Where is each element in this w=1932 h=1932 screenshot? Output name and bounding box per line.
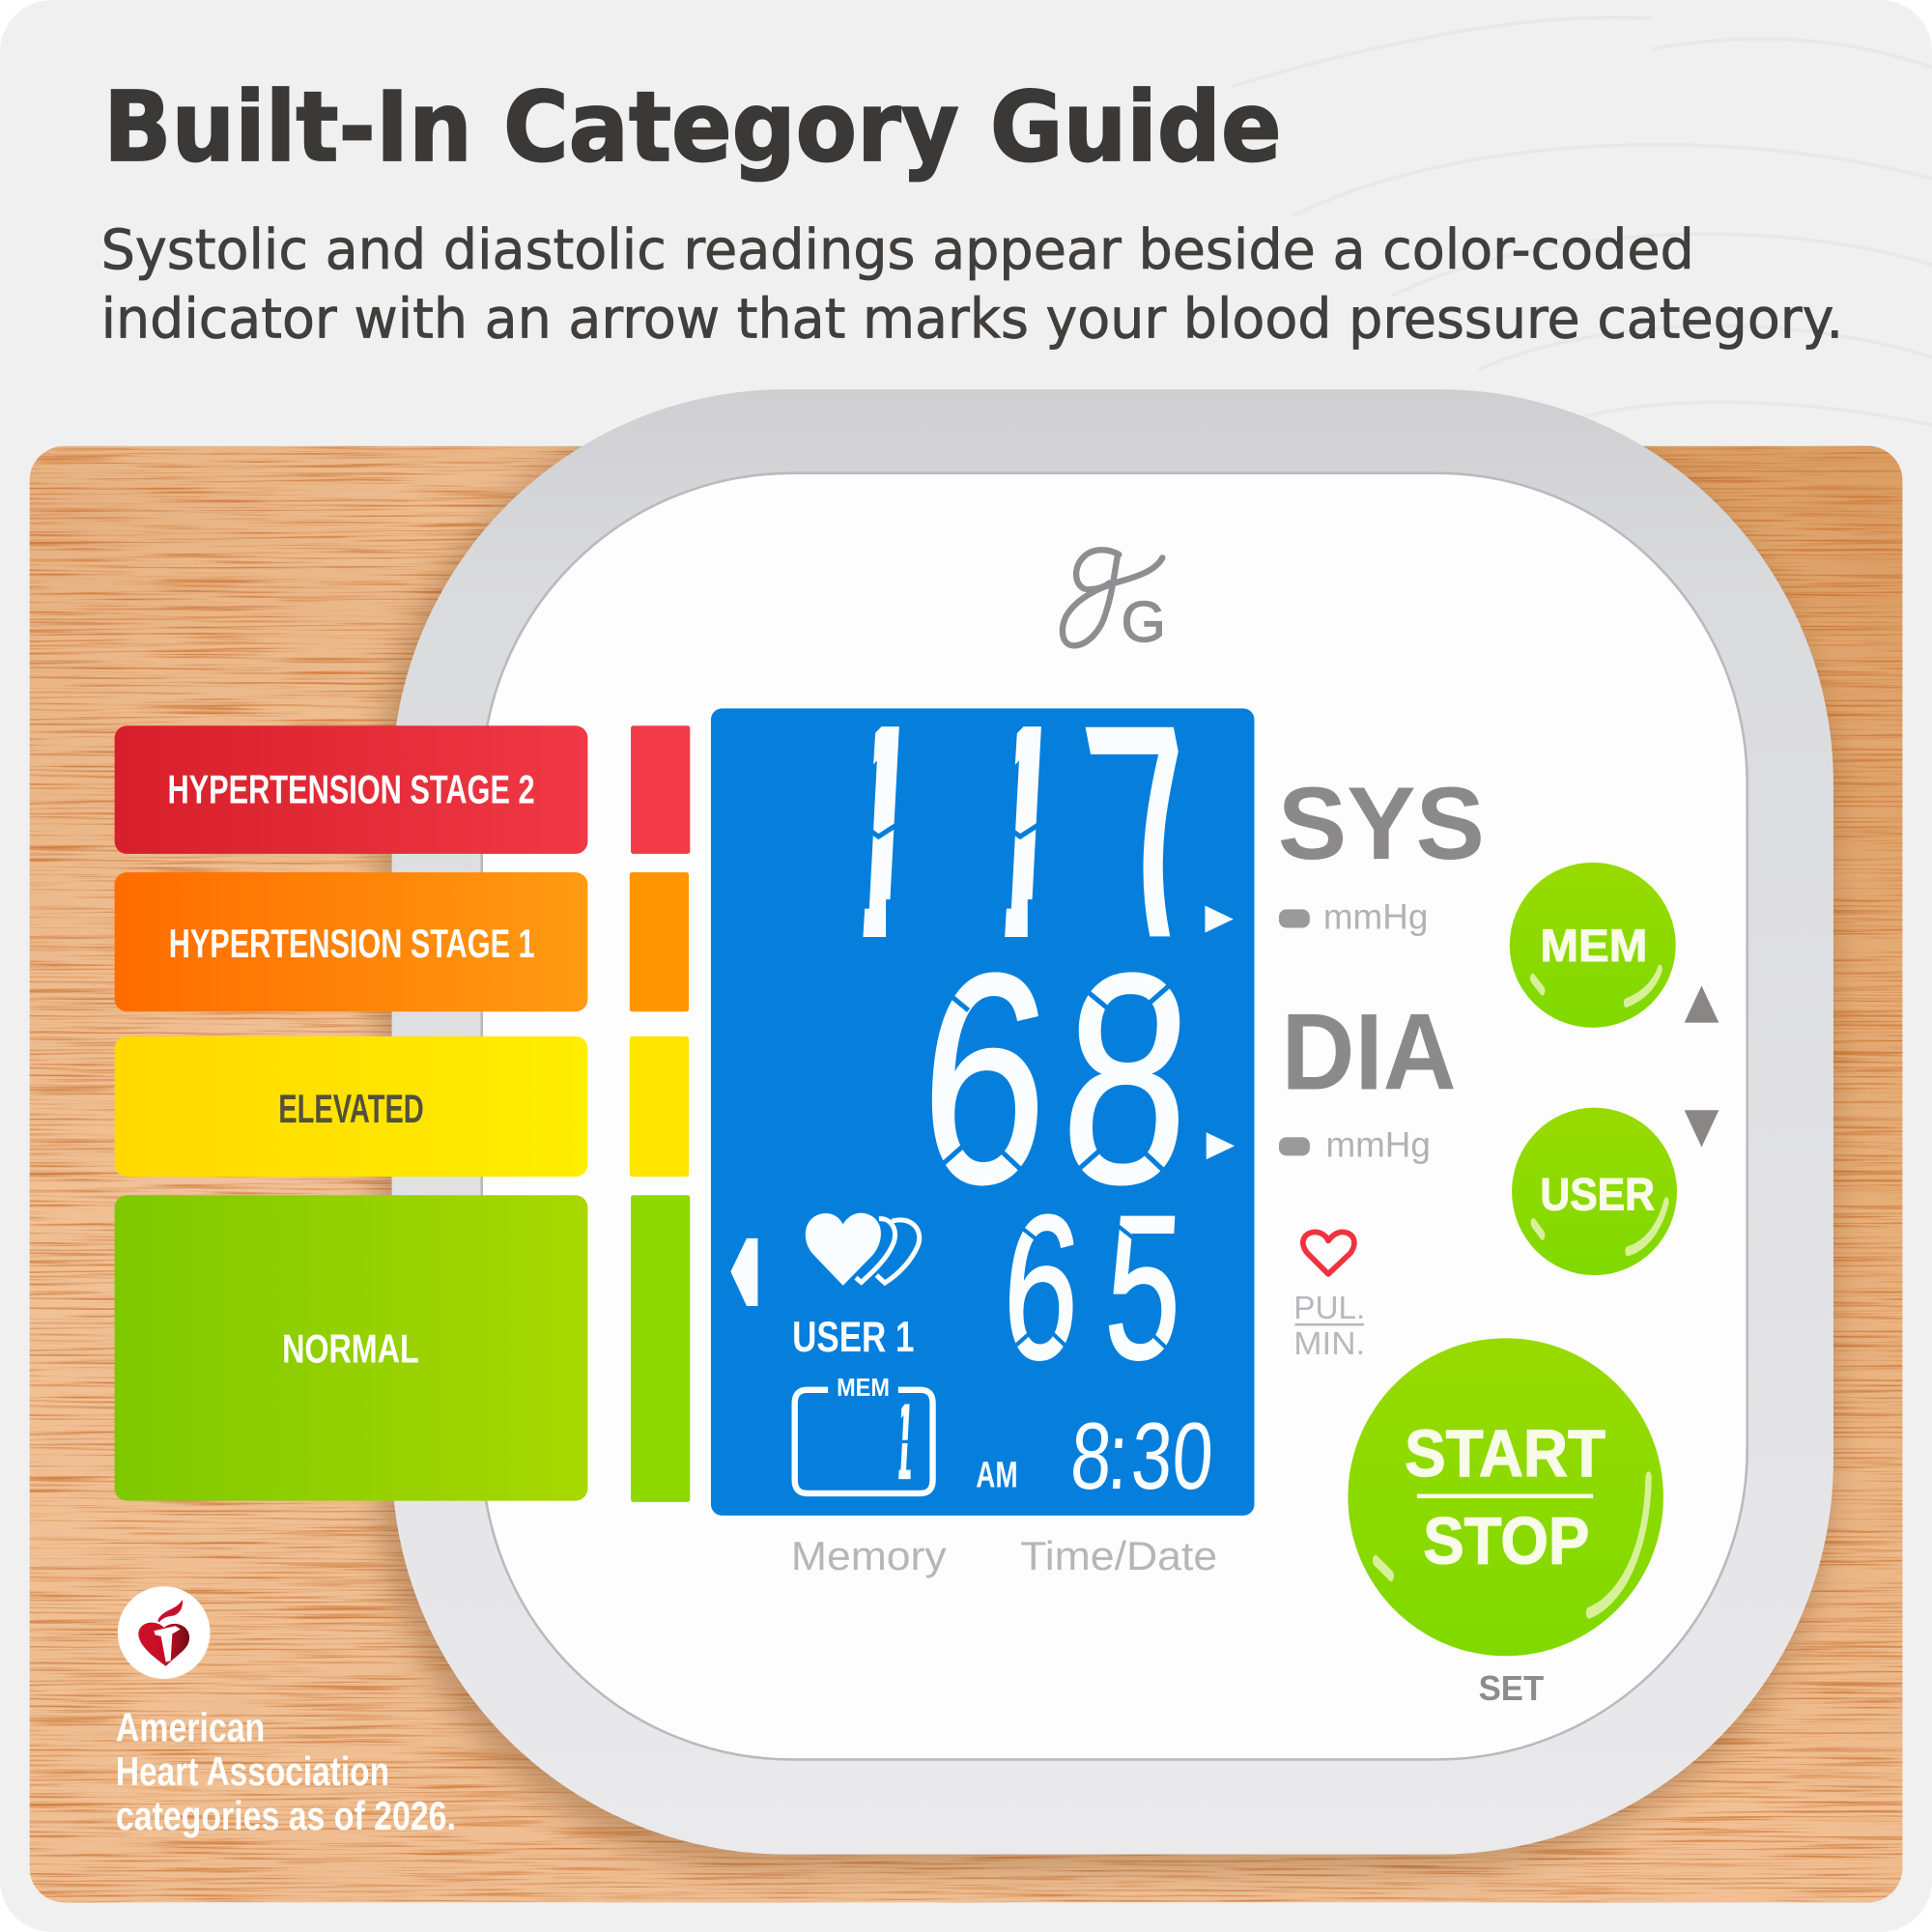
color scale indicator [630,725,690,1502]
panel: wood surface [30,402,1902,1902]
category: hypertension stage 1 [115,872,587,1011]
label: diastolic mmHg: mmHg [1325,1125,1431,1165]
button: USER [1512,1108,1677,1275]
reading: systolic 117 [813,666,1234,998]
note: category source: American [116,1704,265,1749]
label: DIA: DIA [1282,991,1457,1113]
category: normal [115,1195,587,1501]
icon: down arrow [1685,1110,1719,1148]
panel: LCD screen [711,666,1254,1516]
label: Memory: Memory [791,1533,947,1578]
button: START STOP: STOP [1423,1504,1589,1578]
reading: systolic 117: 11 [819,667,1083,998]
note: category source [116,1704,456,1838]
label: SET: SET [1479,1669,1544,1708]
memory indicator: 1 [886,1381,923,1502]
button: START STOP [1348,1338,1663,1656]
note: category source: categories as of 2026. [116,1793,456,1838]
label: Time/Date: Time/Date [1020,1533,1217,1578]
device: blood pressure monitor body [392,389,1833,1855]
label: pulse per minute: MIN. [1293,1326,1365,1362]
category: hypertension stage 2 [115,725,587,854]
memory indicator: MEM [837,1375,890,1402]
reading: diastolic 68: 68 [914,913,1198,1246]
clock: 8:30: 8:30 [1068,1403,1216,1509]
icon: brand logo: G [1122,589,1166,654]
icon: category indicator arrow [730,1238,757,1306]
label: diastolic mmHg [1279,1125,1431,1165]
icon: pulse heart [1303,1232,1354,1274]
label: pulse per minute: PUL. [1293,1291,1365,1326]
note: category source: Heart Association [116,1748,389,1794]
button: START STOP: START [1405,1416,1605,1491]
icon: up arrow [1685,985,1719,1023]
button: USER: USER [1540,1170,1655,1221]
icon: systolic arrow [1205,906,1234,933]
category: hypertension stage 2: HYPERTENSION STAGE 2 [167,767,535,812]
subtitle text: indicator with an arrow that marks your blood pressure category. [101,286,1843,351]
icon: American Heart Association logo [118,1586,210,1679]
icon: diastolic arrow [1207,1132,1235,1159]
memory indicator [795,1375,933,1502]
label: SYS: SYS [1278,765,1485,881]
button: MEM [1510,863,1676,1028]
label: AM: AM [976,1455,1018,1496]
category: normal: NORMAL [282,1326,419,1372]
category: hypertension stage 1: HYPERTENSION STAGE 1 [169,921,535,966]
label: systolic mmHg: mmHg [1323,897,1428,937]
title: Built-In Category Guide [103,72,1282,184]
reading: systolic 117: 7 [1065,666,1234,998]
button: MEM: MEM [1540,921,1647,972]
category: elevated: ELEVATED [278,1086,424,1131]
category: elevated [115,1037,587,1177]
subtitle text: Systolic and diastolic readings appear beside a color-coded [101,217,1694,282]
icon: brand logo [1063,550,1166,654]
label: user 1: USER 1 [792,1314,914,1361]
reading: pulse 65: 65 [998,1174,1187,1403]
label: pulse per minute [1293,1291,1365,1362]
subtitle text [101,217,1843,351]
icon: user hearts [806,1213,920,1286]
